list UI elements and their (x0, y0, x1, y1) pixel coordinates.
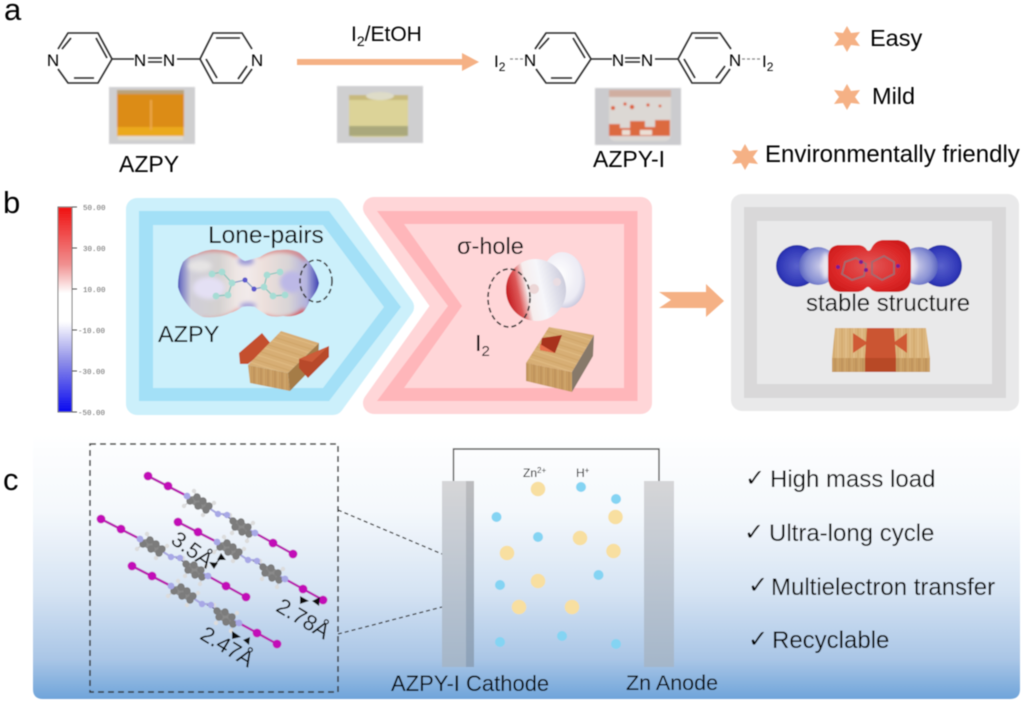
advantage: recyclable: Recyclable (772, 627, 889, 654)
ESP colour scale (58, 205, 106, 418)
ESP colour scale: 10.00 (83, 287, 106, 295)
ESP colour scale: -30.00 (78, 369, 106, 377)
dashed highlight: sigma hole (488, 269, 530, 327)
distance 2.78 A: 2.78Å (272, 593, 335, 644)
structure: AZPY-I: I (494, 52, 499, 71)
external circuit wire (454, 449, 659, 481)
molecule row 1 (144, 472, 297, 558)
electrostatic potential surface: AZPY (175, 248, 321, 321)
structure: AZPY-I: N (524, 51, 536, 70)
photo: AZPY vial (109, 87, 195, 144)
wood block with notch (526, 327, 594, 392)
label: AZPY: AZPY (158, 321, 220, 347)
advantage: multielectron transfer: Multielectron transfer (771, 574, 995, 601)
structure: AZPY: N (163, 51, 175, 70)
structure: AZPY-I (494, 33, 774, 83)
panel label c: c (3, 462, 18, 497)
wood block with protruding wedges (239, 331, 329, 391)
label: I2: 2 (482, 343, 490, 360)
photo: iodine solution vial (337, 86, 423, 143)
panel: I2 sigma hole (374, 208, 641, 403)
reaction arrow (297, 53, 479, 71)
label: I2: I (475, 330, 482, 356)
structure: AZPY: N (47, 51, 59, 70)
zinc ions (500, 482, 623, 614)
ESP colour scale: 30.00 (83, 246, 106, 254)
ESP colour scale: -10.00 (78, 328, 106, 336)
feature: Environmentally friendly: Environmentally friendly (765, 141, 1020, 168)
panel: battery background (33, 432, 1020, 699)
structure: AZPY-I: 2 (499, 60, 506, 74)
ion label: Zn2+: 2+ (537, 466, 546, 475)
reaction condition: I (351, 23, 357, 46)
advantage: recyclable: ✓ (748, 625, 768, 653)
structure: AZPY-I: N (641, 51, 653, 70)
structure: AZPY: N (134, 51, 146, 70)
ESP colour scale: 50.00 (83, 205, 106, 213)
ion label: Zn2+: Zn (523, 466, 537, 480)
label: AZPY: AZPY (119, 151, 179, 177)
panel label b: b (3, 185, 20, 220)
ion label: H+: + (585, 466, 590, 475)
structure: AZPY-I: 2 (767, 60, 774, 74)
electrode: cathode (442, 481, 474, 667)
label: anode: Zn Anode (626, 671, 718, 695)
molecule row 4 (128, 562, 281, 648)
reaction condition: 2 (357, 33, 365, 49)
label: cathode: AZPY-I Cathode (391, 671, 549, 696)
label: sigma-hole: σ-hole (457, 233, 524, 259)
advantages list (744, 464, 995, 654)
reaction condition: /EtOH (365, 23, 422, 46)
advantage: multielectron transfer: ✓ (748, 571, 768, 599)
structure: AZPY: N (251, 51, 263, 70)
photo: AZPY-I vial (595, 88, 681, 145)
wood block with wedges inserted (832, 328, 930, 372)
battery schematic (391, 449, 718, 696)
distance 3.5 A: 3.5Å (167, 526, 218, 573)
molecule row 2 (97, 515, 250, 601)
structure: AZPY-I: N (612, 51, 624, 70)
arrow to stable structure (659, 284, 724, 317)
feature: Mild: Mild (872, 83, 915, 109)
panel: AZPY lone pairs (137, 209, 403, 404)
structure: AZPY (47, 33, 263, 83)
ion label: H+: H (576, 466, 585, 480)
advantage: ultra-long cycle: ✓ (744, 518, 764, 546)
advantage: ultra-long cycle: Ultra-long cycle (769, 520, 934, 547)
label: AZPY-I: AZPY-I (593, 146, 665, 172)
feature list (732, 25, 1020, 170)
feature: Easy (834, 25, 922, 52)
electrode: anode (644, 481, 674, 667)
label: Lone-pairs: Lone-pairs (208, 222, 324, 249)
structure: AZPY-I: I (762, 52, 767, 71)
panel: stable structure (731, 194, 1019, 411)
molecule row 3 (174, 518, 327, 604)
proton ions (492, 482, 621, 649)
distance 2.47 A: 2.47Å (196, 621, 259, 672)
electrostatic potential surface: complex (776, 240, 962, 292)
zoom lead lines (338, 510, 442, 634)
inset: crystal structure (90, 444, 338, 692)
ESP colour scale: -50.00 (78, 410, 106, 418)
dashed highlight: lone pair (300, 260, 332, 302)
label: stable structure: stable structure (806, 290, 970, 317)
electrostatic potential surface: I2 (500, 249, 589, 327)
feature: Easy: Easy (870, 25, 922, 51)
advantage: high mass load: High mass load (770, 466, 935, 493)
structure: AZPY-I: N (729, 51, 741, 70)
advantage: high mass load: ✓ (745, 464, 765, 492)
feature: Mild (834, 83, 915, 110)
